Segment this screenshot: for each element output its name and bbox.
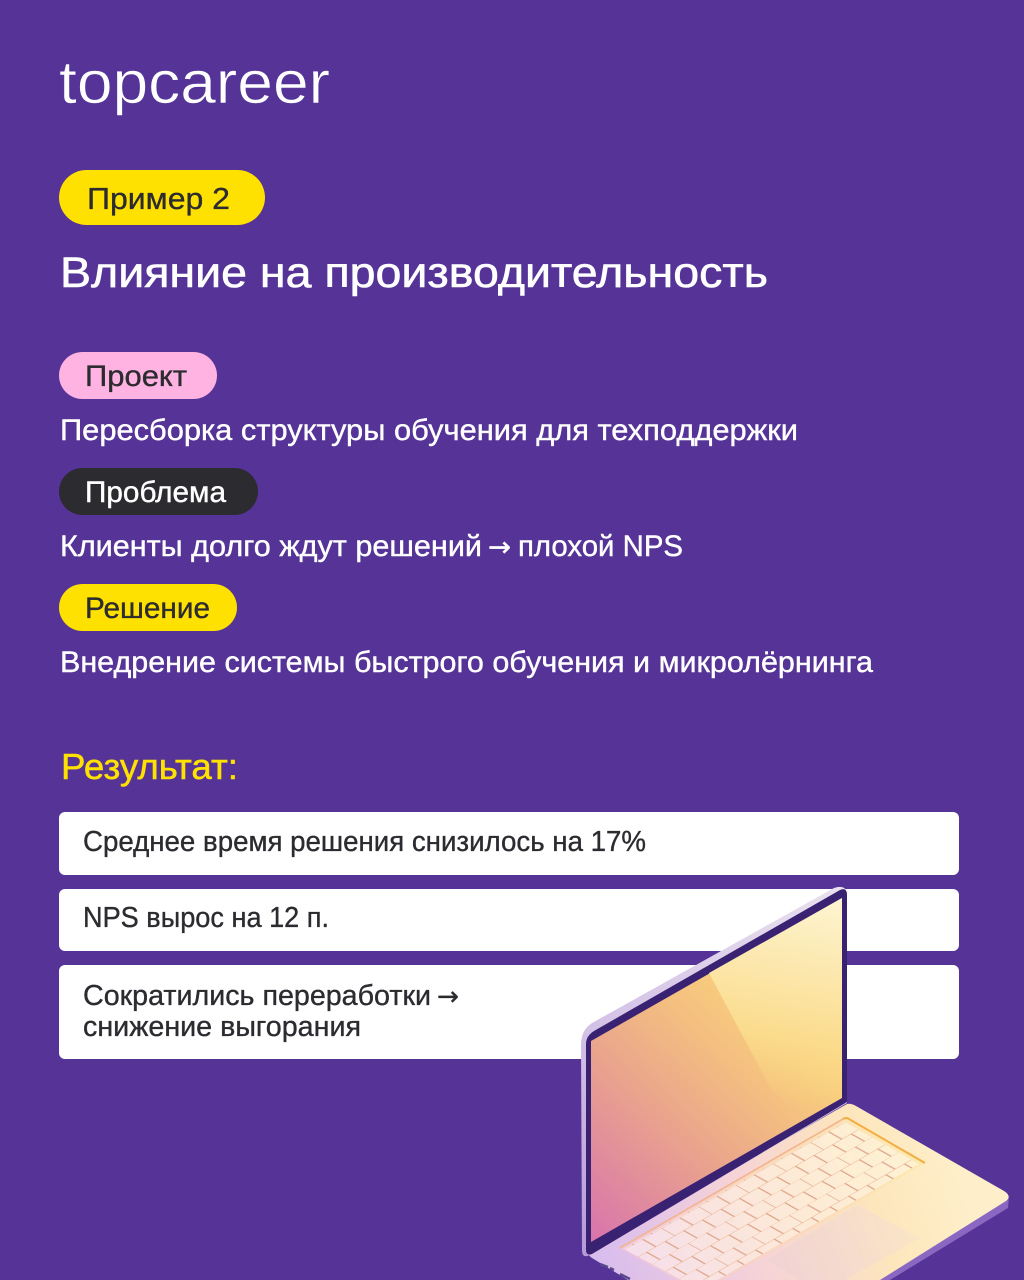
card: переработки: Сократились переработки [83, 980, 431, 1012]
card: переработки: → [437, 982, 459, 1012]
text: проблема description: Клиенты долго ждут решений [60, 530, 482, 563]
card: NPS [59, 889, 959, 951]
tag: Проект [59, 352, 217, 399]
screen display [591, 898, 842, 1242]
text: проект description: Пересборка структуры обучения для техподдержки [60, 414, 798, 447]
panel: проект [59, 352, 798, 447]
logo: topcareer: topcareer [59, 49, 330, 116]
screen bezel [586, 889, 847, 1254]
card: среднее время [59, 812, 959, 875]
laptop base underside [760, 1196, 1009, 1280]
badge: Пример 2: Пример 2 [87, 181, 230, 216]
ports [600, 1264, 630, 1279]
heading: Влияние на производительность [60, 249, 768, 297]
panel: решение [59, 584, 874, 679]
heading: Результат: Результат: [61, 746, 238, 787]
text: проблема description: → [488, 532, 511, 563]
card: NPS: NPS вырос на 12 п. [83, 902, 329, 934]
screen glare [709, 898, 842, 1122]
card: среднее время: Среднее время решения снизилось на 17% [83, 826, 646, 858]
card: переработки: снижение выгорания [83, 1011, 361, 1043]
screen lid outer [581, 887, 847, 1256]
keyboard [620, 1118, 925, 1280]
illustration: laptop [581, 887, 1009, 1280]
laptop base [588, 1104, 1009, 1280]
card: переработки [59, 965, 959, 1059]
tag: Решение: Решение [85, 592, 210, 625]
trackpad [767, 1205, 920, 1280]
badge: Пример 2 [59, 170, 265, 225]
tag: Решение [59, 584, 237, 631]
panel: проблема [59, 468, 683, 563]
tag: Проблема: Проблема [85, 476, 227, 509]
text: решение description: Внедрение системы быстрого обучения и микролёрнинга [60, 646, 874, 679]
tag: Проект: Проект [85, 360, 187, 393]
text: проблема description: плохой NPS [518, 530, 683, 563]
tag: Проблема [59, 468, 258, 515]
text: проблема description [60, 530, 683, 563]
